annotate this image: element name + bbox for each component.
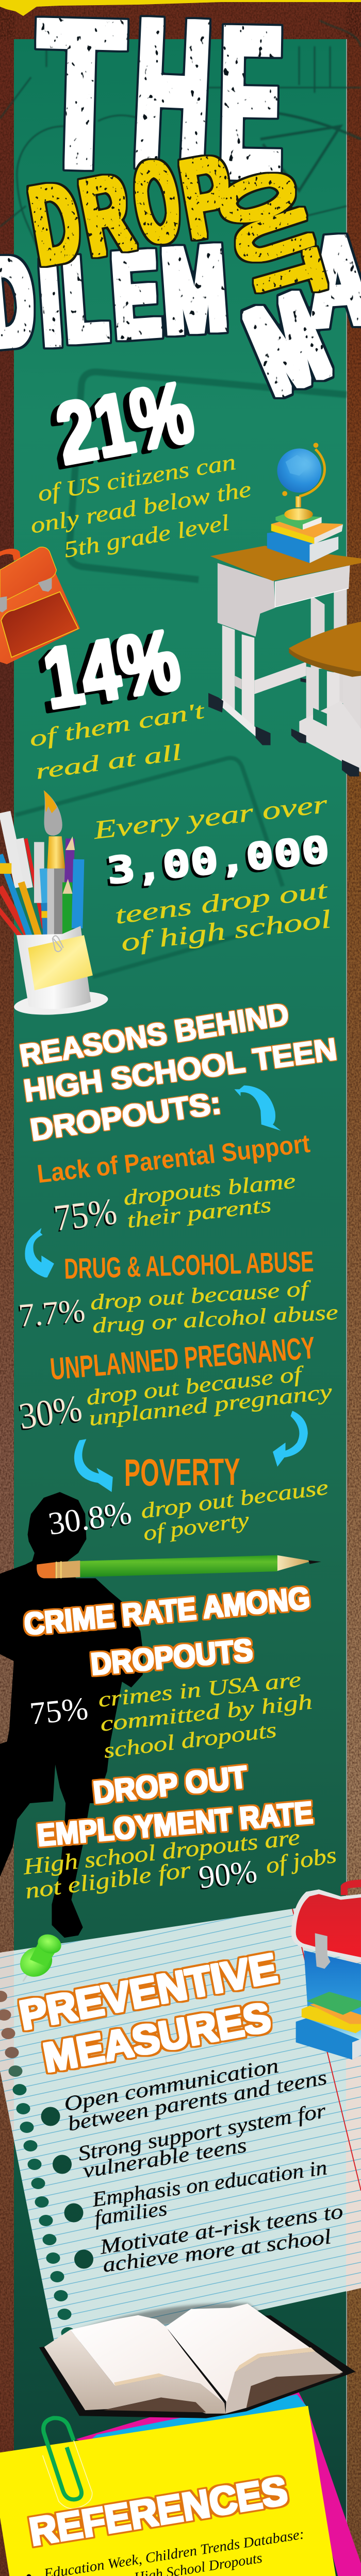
reason: unplanned pregnancy: unplanned pregnancy — [88, 1380, 334, 1431]
reason: drug and alcohol abuse: drop out because of — [90, 1277, 313, 1315]
heading: reasons behind high school teen dropouts: REASONS BEHIND — [18, 996, 291, 1073]
item: open communication — [41, 2053, 329, 2136]
item: open communication: Open communication — [62, 2053, 281, 2116]
icon: pencil cup — [0, 790, 109, 1018]
reason: drug and alcohol abuse: drug or alcohol abuse — [92, 1300, 339, 1338]
heading: references: REFERENCES — [26, 2469, 290, 2554]
stat: 3,00,000 teens: Every year over — [91, 789, 329, 844]
section: crime rate among dropouts: committed by high — [99, 1690, 314, 1736]
icon: green pencil — [37, 1555, 321, 1578]
silhouette of teen — [0, 1492, 143, 1938]
title: DILEMMA: E — [109, 227, 163, 362]
reason heading: poverty: POVERTY — [124, 1450, 240, 1494]
reason: unplanned pregnancy: drop out because of — [85, 1362, 306, 1410]
section: crime rate among dropouts — [23, 1581, 314, 1763]
books — [296, 2018, 361, 2060]
reason: drug and alcohol abuse: 7.7% — [17, 1292, 87, 1334]
panel: references note — [0, 2391, 361, 2576]
reason: drug and alcohol abuse — [17, 1245, 339, 1338]
desk body — [218, 563, 350, 637]
title: DILEMMA: I — [37, 236, 64, 370]
poverty statistic: of poverty — [142, 1508, 251, 1546]
heading: preventive measures: PREVENTIVE — [16, 1944, 281, 2039]
title: DILEMMA: M — [231, 268, 344, 420]
title: DROPOUT: D — [22, 159, 89, 289]
heading: reasons behind high school teen dropouts: DROPOUTS: — [28, 1086, 223, 1147]
poverty statistic: drop out because — [139, 1476, 330, 1523]
sticky note — [28, 935, 93, 990]
section: crime rate among dropouts: CRIME RATE AMONG — [23, 1581, 311, 1641]
arrow: right to poverty — [273, 1411, 308, 1467]
reason: unplanned pregnancy: 30% — [17, 1387, 85, 1437]
top torn yellow strip — [0, 0, 361, 16]
poverty statistic: 30.8% — [46, 1495, 134, 1542]
heading: preventive measures: MEASURES — [40, 1994, 274, 2081]
item: strong support system: vulnerable teens — [81, 2133, 248, 2182]
title: DROPOUT: O — [126, 136, 188, 268]
heading: preventive measures — [16, 1944, 281, 2081]
reason: lack of parental support: their parents — [126, 1193, 272, 1233]
icon: green pushpin — [14, 1931, 64, 1982]
item: emphasis on education: families — [93, 2196, 169, 2230]
globe — [277, 443, 325, 520]
reason: unplanned pregnancy — [17, 1330, 334, 1437]
icon: orange backpack — [0, 547, 80, 664]
stat: 14%: read at all — [34, 739, 183, 784]
item: motivate at-risk teens: achieve more at school — [101, 2224, 333, 2277]
desk back legs — [311, 586, 347, 703]
title: DROPOUT: U — [212, 199, 335, 276]
title: DROPOUT — [22, 132, 346, 311]
stat: 21%: only read below the — [28, 476, 253, 538]
title: DROPOUT: O — [195, 160, 319, 237]
item: open communication: between parents and teens — [65, 2065, 329, 2136]
section: drop out employment rate: EMPLOYMENT RATE — [36, 1795, 314, 1853]
desk top — [210, 546, 361, 581]
stat: 14%: of them can't — [28, 698, 207, 752]
section: drop out employment rate: DROP OUT — [91, 1759, 249, 1810]
stat: 21% — [28, 363, 253, 563]
stat: 21%: 21% — [50, 363, 200, 483]
stat: 3,00,000 teens — [91, 789, 333, 957]
section: drop out employment rate: High school dropouts are — [22, 1824, 301, 1879]
title: DILEMMA: L — [60, 231, 110, 366]
heading: reasons behind high school teen dropouts — [18, 996, 339, 1147]
icon: green paper clip — [43, 2418, 92, 2509]
stat: 3,00,000 teens: of high school — [120, 904, 333, 957]
heading: reasons behind high school teen dropouts: HIGH SCHOOL TEEN — [22, 1031, 339, 1108]
reason: lack of parental support: 75% — [52, 1191, 119, 1239]
arrow: left to poverty — [74, 1439, 113, 1492]
section: drop out employment rate — [22, 1759, 338, 1904]
stat: 14% — [28, 611, 207, 784]
stat: 21%: of US citizens can — [36, 449, 238, 506]
section: drop out employment rate: of jobs — [264, 1842, 338, 1878]
section: crime rate among dropouts: DROPOUTS — [89, 1633, 254, 1682]
paper clip — [53, 936, 63, 952]
item: motivate at-risk teens: Motivate at-risk teens to — [97, 2199, 344, 2259]
item: emphasis on education: Emphasis on education in — [90, 2155, 329, 2211]
arrow: to drug and alcohol abuse — [25, 1228, 54, 1277]
item: emphasis on education — [64, 2155, 329, 2230]
section: crime rate among dropouts: school dropouts — [103, 1718, 278, 1763]
title: THE — [34, 0, 284, 222]
title: DILEMMA — [0, 210, 361, 420]
item: strong support system — [53, 2098, 328, 2182]
section: crime rate among dropouts: crimes in USA are — [97, 1668, 302, 1712]
stool — [289, 622, 361, 776]
paintbrush — [44, 790, 65, 935]
section: crime rate among dropouts: 75% — [28, 1691, 90, 1732]
stat: 21%: 5th grade level — [62, 510, 231, 563]
icon: open book — [39, 2303, 356, 2418]
arrow: to lack of parental support — [234, 1086, 281, 1131]
title: DILEMMA: M — [158, 221, 230, 358]
title: DROPOUT: R — [72, 151, 141, 279]
title: DROPOUT: T — [232, 243, 346, 311]
item: strong support system: Strong support system for — [76, 2098, 328, 2165]
icon: desk with globe and books — [208, 443, 361, 776]
section: drop out employment rate: not eligible for — [24, 1857, 193, 1904]
title: DROPOUT: P — [172, 132, 241, 262]
stationery — [0, 812, 54, 940]
stat: 3,00,000 teens: 3,00,000 — [105, 828, 332, 892]
stat: 14%: 14% — [37, 611, 186, 727]
reason: lack of parental support: Lack of Parental Support — [36, 1129, 311, 1189]
reason: lack of parental support — [36, 1129, 311, 1239]
section: drop out employment rate: 90% — [197, 1854, 259, 1895]
panel: notebook paper — [0, 1896, 361, 2354]
desk front legs and rails — [208, 625, 306, 745]
book stack — [267, 514, 343, 563]
stat: 3,00,000 teens: teens drop out — [113, 876, 330, 929]
poverty statistic — [46, 1476, 330, 1546]
list: preventive measures — [41, 2053, 344, 2277]
icon: red schoolbag with books — [291, 1879, 361, 2060]
item: motivate at-risk teens — [74, 2199, 344, 2277]
reason: lack of parental support: dropouts blame — [122, 1169, 297, 1210]
